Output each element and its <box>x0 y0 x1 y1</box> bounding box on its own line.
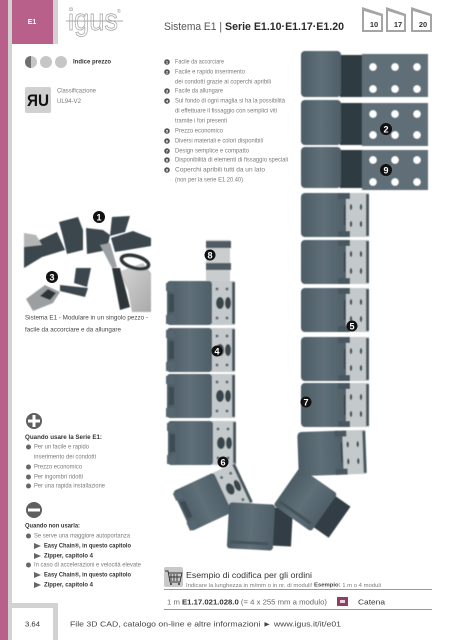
size icons 10 17 20: 10 <box>370 20 378 29</box>
feature list: Sul fondo di ogni maglia si ha la possibilità <box>175 99 286 105</box>
chain links being cut <box>24 216 151 297</box>
title: Sistema E1 | <box>164 21 222 33</box>
size icons 10 17 20 <box>362 7 432 32</box>
scissors photo <box>24 216 151 312</box>
number markers: 6 <box>220 458 226 468</box>
section tab E1 <box>12 0 58 44</box>
icon: plus <box>26 413 42 429</box>
feature list: 6 <box>166 139 169 144</box>
title <box>164 21 344 33</box>
feature list: Facile da allungare <box>175 89 224 95</box>
UL classification: UL94-V2 <box>57 99 82 105</box>
order code row <box>164 589 432 610</box>
when to use: Per una rapida installazione <box>34 484 106 490</box>
when to use: Per un facile e rapido <box>34 445 90 451</box>
feature list: Diversi materiali e colori disponibili <box>175 139 263 145</box>
feature list: 1 <box>166 60 169 65</box>
feature list: dei condotti grazie ai coperchi apribili <box>175 80 271 86</box>
feature list: 8 <box>166 158 169 163</box>
title: Serie E1.10·E1.17·E1.20 <box>225 21 344 33</box>
size icons 10 17 20: 17 <box>394 20 402 29</box>
chain: top horizontal links <box>301 51 428 190</box>
when not to use: Quando non usarla: <box>25 524 80 530</box>
photo caption <box>25 316 148 334</box>
feature list: (non per la serie E1.20.40) <box>175 178 243 184</box>
number markers: 4 <box>214 346 220 356</box>
feature list: Facile e rapido inserimento <box>175 70 246 76</box>
when not to use: In caso di accelerazioni e velocità elevate <box>34 563 142 569</box>
section tab E1: E1 <box>28 19 36 26</box>
feature list: 3 <box>166 89 169 94</box>
feature list <box>164 59 288 184</box>
hand <box>118 263 151 312</box>
feature list: di effettuare il fissaggio con semplici viti <box>175 109 277 115</box>
when not to use: Zipper, capitolo 4 <box>44 583 94 589</box>
order example heading: Esempio di codifica per gli ordini <box>186 571 312 580</box>
scissors <box>100 243 150 310</box>
number markers: 3 <box>49 272 55 282</box>
when not to use: Se serve una maggiore autoportanza <box>34 534 131 540</box>
photo caption: facile da accorciare e da allungare <box>25 328 122 334</box>
size icons 10 17 20: 20 <box>419 20 427 29</box>
icon: minus <box>26 502 42 518</box>
logo igus: ® <box>117 8 121 15</box>
chain: left column links <box>166 281 236 465</box>
feature list: Design semplice e compatto <box>175 149 250 155</box>
photo caption: Sistema E1 - Modulare in un singolo pezzo - <box>25 316 148 322</box>
page number box <box>12 603 58 640</box>
when to use: Prezzo economico <box>34 465 83 471</box>
order code row: 1 m E1.17.021.028.0 (= 4 x 255 mm a modulo) <box>167 598 328 606</box>
left fingers <box>24 233 42 247</box>
feature list: Coperchi apribili tutti da un lato <box>175 168 266 174</box>
feature list: Disponibilità di elementi di fissaggio speciali <box>175 158 288 164</box>
feature list: 5 <box>166 129 169 134</box>
UL classification: ЯU <box>27 91 49 110</box>
when not to use: Zipper, capitolo 4 <box>44 554 94 560</box>
opened link <box>26 285 60 311</box>
when to use: inserimento dei condotti <box>34 455 96 461</box>
UL classification <box>25 87 97 113</box>
page number box: 3.64 <box>25 622 40 628</box>
feature list: 7 <box>166 149 169 154</box>
feature list: 9 <box>166 168 169 173</box>
chain photo: energy chain <box>166 51 428 552</box>
price index: Indice prezzo <box>73 60 111 66</box>
number markers: 9 <box>383 166 389 176</box>
chain: right column links <box>297 193 369 476</box>
order example heading: Indicare la lunghezza in m/mm o in nr. di moduli! Esempio: 1 m o 4 moduli <box>186 583 381 589</box>
icon: cart <box>164 567 183 587</box>
feature list: Facile da accorciare <box>175 60 225 66</box>
footer text: File 3D CAD, catalogo on-line e altre informazioni ► www.igus.it/it/e01 <box>70 620 341 628</box>
feature list: Prezzo economico <box>175 129 224 135</box>
when not to use: Easy Chain®, in questo capitolo <box>44 572 131 579</box>
price index <box>25 56 111 68</box>
when not to use <box>25 524 142 589</box>
number markers: 1 <box>96 212 102 222</box>
number markers: 7 <box>303 398 309 408</box>
feature list: 2 <box>166 70 169 75</box>
when to use: Per ingombri ridotti <box>34 475 83 481</box>
feature list: tramite i fori presenti <box>175 119 227 125</box>
side bar <box>0 0 12 640</box>
number markers: 5 <box>349 322 355 332</box>
chain: mounting bracket <box>206 240 231 282</box>
feature list: 4 <box>166 99 169 104</box>
when not to use: Easy Chain®, in questo capitolo <box>44 543 131 550</box>
order code row: Catena <box>358 598 386 606</box>
number markers: 2 <box>383 124 389 134</box>
number markers: 8 <box>207 250 213 260</box>
UL classification: Classificazione <box>57 89 97 95</box>
when to use <box>25 435 106 490</box>
chain: bottom bend links <box>172 463 352 552</box>
when to use: Quando usare la Serie E1: <box>25 435 102 441</box>
order example heading <box>186 571 381 589</box>
logo igus: igus <box>68 2 118 37</box>
number markers <box>46 123 392 468</box>
